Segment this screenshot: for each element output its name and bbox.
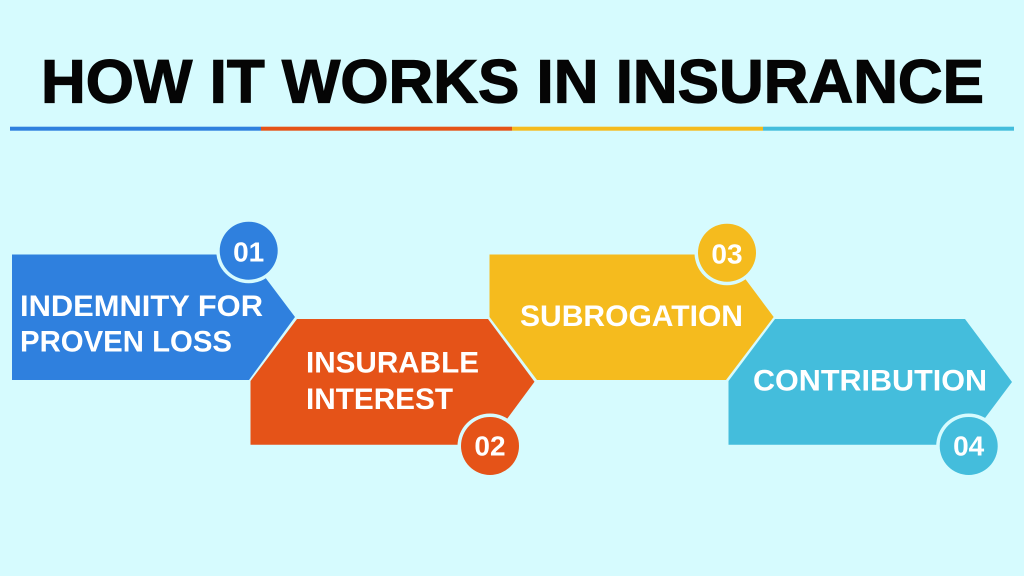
title underline: four colour segments <box>10 127 1014 131</box>
badge 01: 01 <box>233 236 264 268</box>
step 01: indemnity for proven loss <box>12 218 295 380</box>
badge 02 <box>458 414 522 478</box>
label: indemnity for proven loss: INDEMNITY FOR <box>20 290 263 323</box>
label: insurable interest: INSURABLE <box>306 347 479 380</box>
step 03: subrogation <box>490 220 774 380</box>
label: indemnity for proven loss: PROVEN LOSS <box>20 326 232 359</box>
arrow shape: blue <box>12 254 295 380</box>
step 04: contribution <box>728 319 1012 478</box>
label: insurable interest <box>306 347 479 416</box>
badge 03 <box>694 220 760 285</box>
label: subrogation: SUBROGATION <box>520 300 743 333</box>
badge 01 <box>216 218 281 283</box>
badge 03: 03 <box>711 238 743 269</box>
badge 02: 02 <box>474 430 506 462</box>
label: insurable interest: INTEREST <box>306 383 453 416</box>
arrow shape: cyan <box>728 319 1012 445</box>
title: HOW IT WORKS IN INSURANCE <box>41 48 984 116</box>
badge 04: 04 <box>953 430 985 462</box>
arrow shape: yellow <box>490 254 774 380</box>
step 02: insurable interest <box>250 319 534 478</box>
arrow shape: orange <box>250 319 534 445</box>
label: contribution: CONTRIBUTION <box>753 365 987 398</box>
label: indemnity for proven loss <box>20 290 263 359</box>
badge 04 <box>936 414 1001 478</box>
